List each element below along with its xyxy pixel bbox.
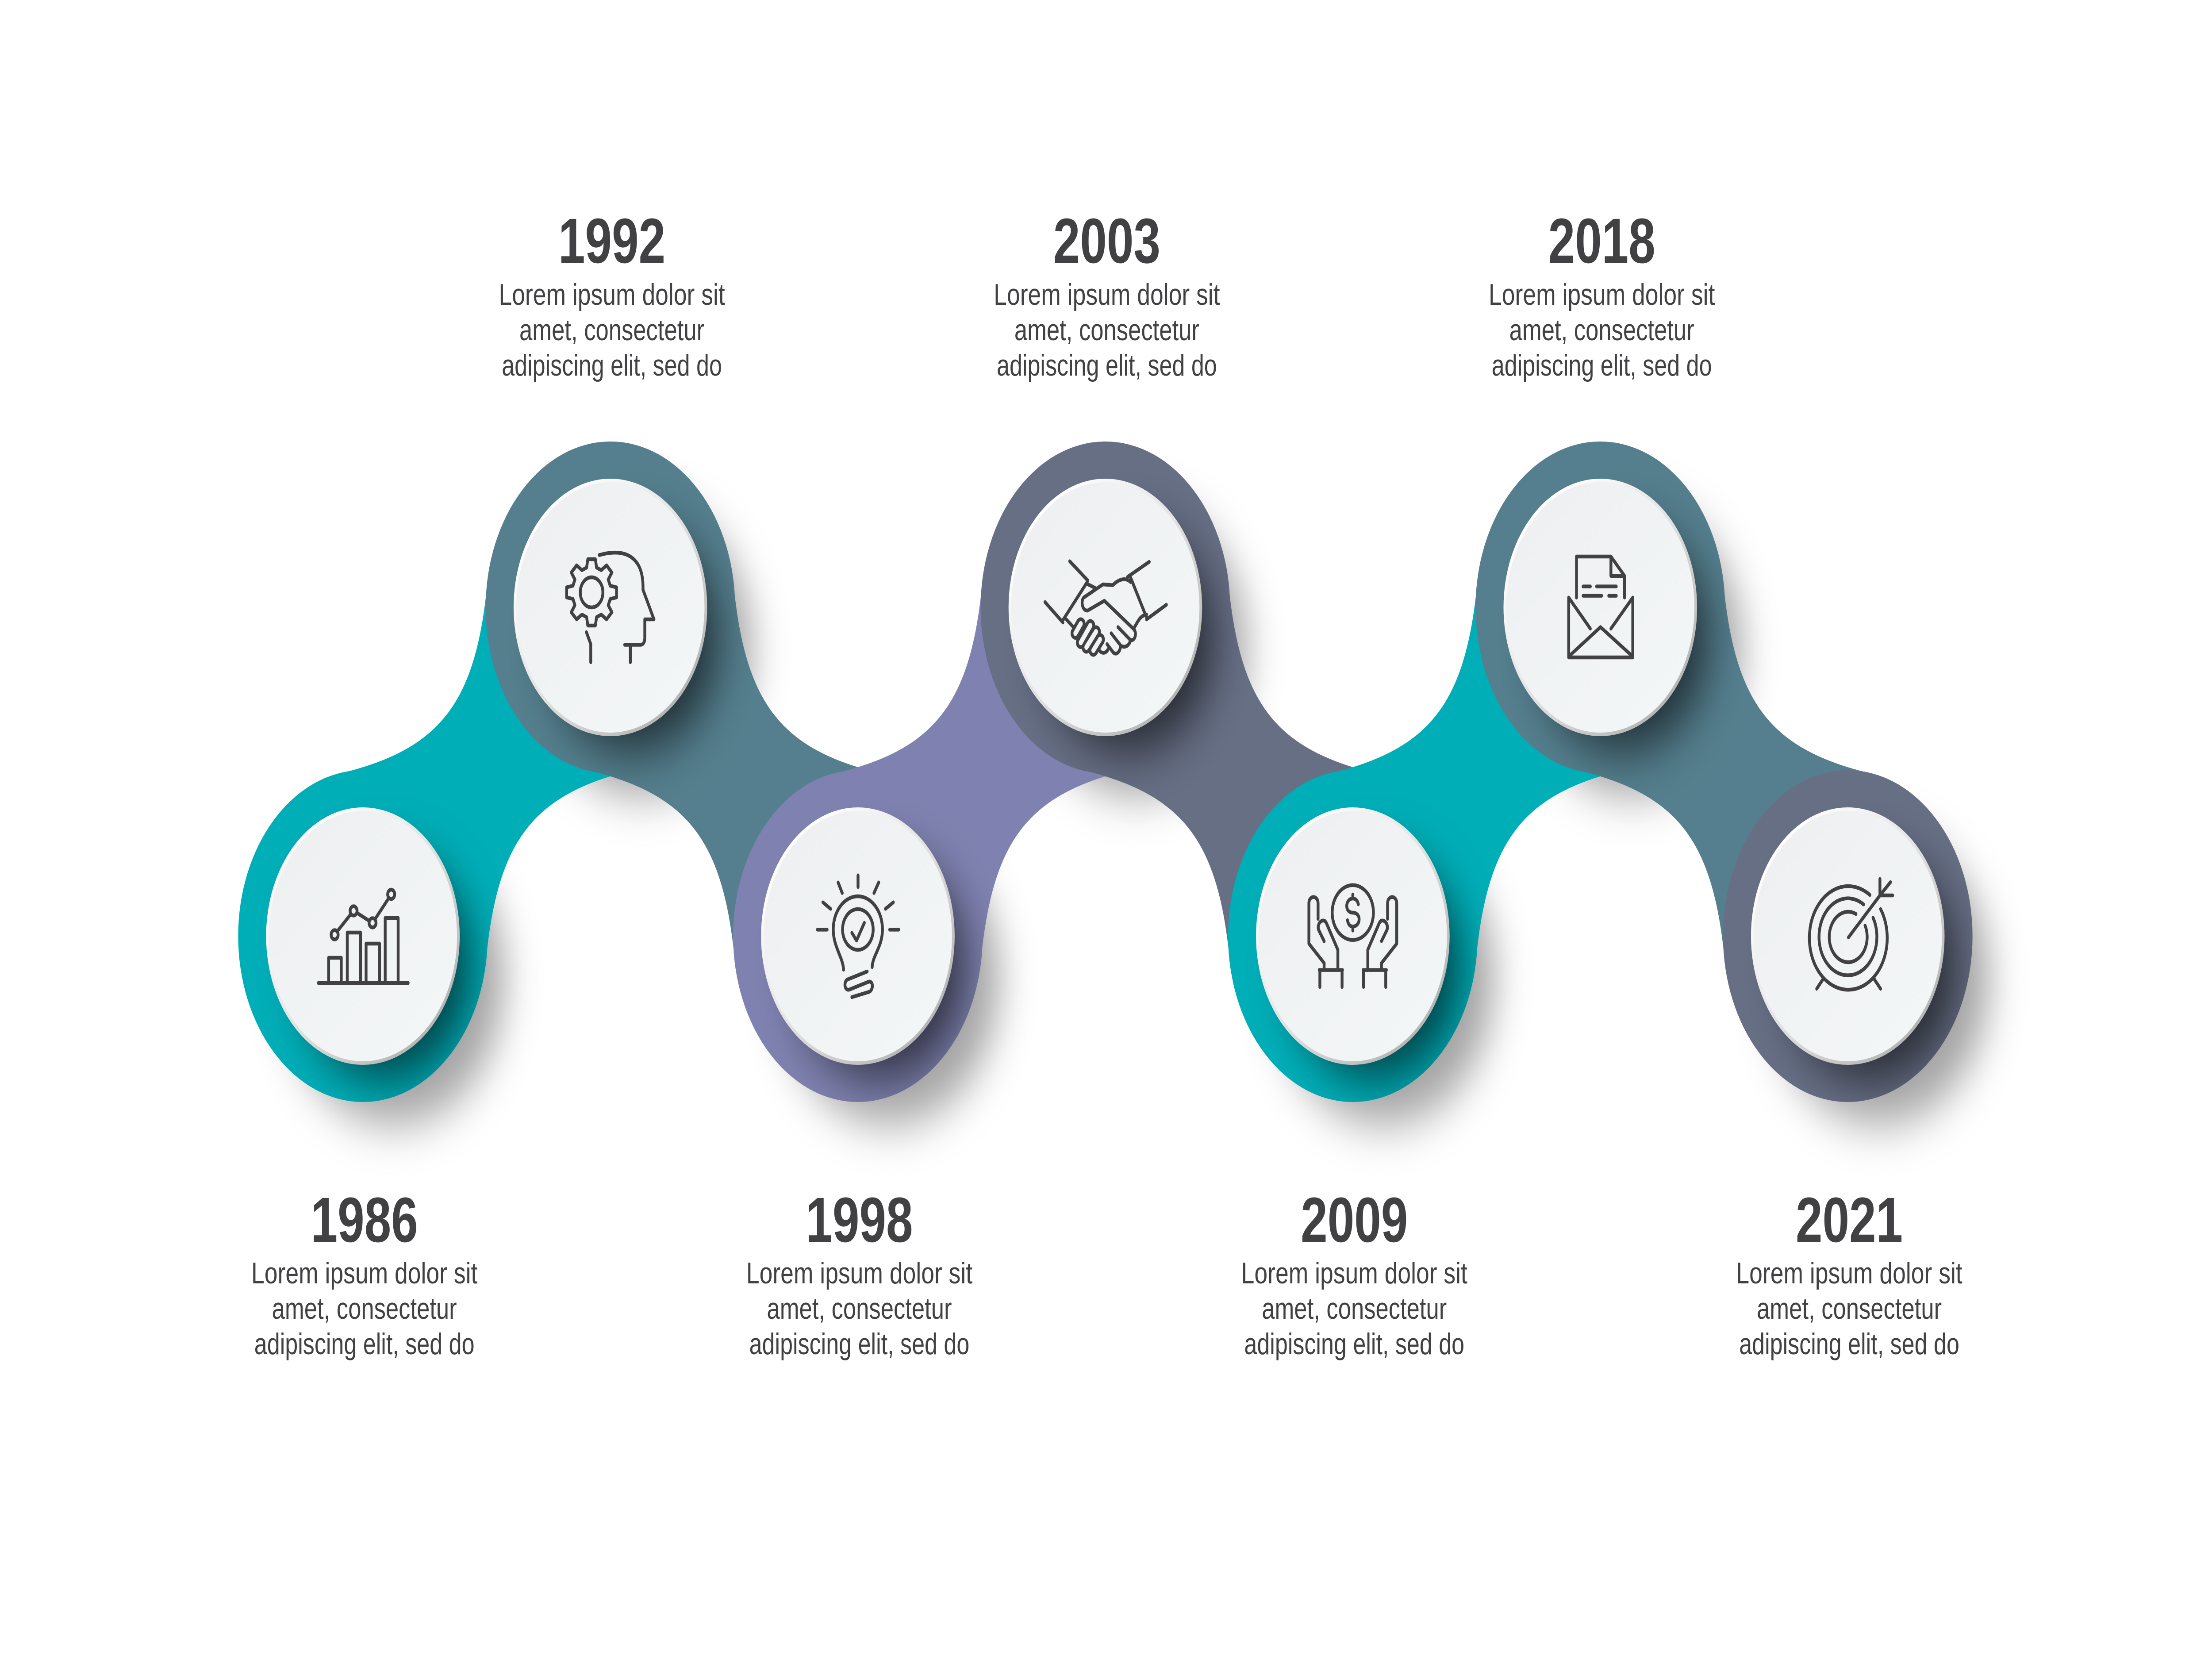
icon: envelope with letter [1569,557,1633,657]
text: 1998: amet, consectetur [767,1292,952,1325]
text: 2003 [994,205,1220,382]
text: 1992: Lorem ipsum dolor sit [499,278,725,311]
node 2021 [1723,770,1973,1102]
disc [1751,807,1944,1065]
text: 2003: amet, consectetur [1014,313,1199,347]
text: 2018: amet, consectetur [1509,313,1694,347]
text: 2021 [1736,1184,1962,1361]
node 2009 [1228,593,1616,1102]
text: 2003: Lorem ipsum dolor sit [994,278,1220,311]
slate ring and connector [981,442,1368,951]
slate ring [1723,770,1973,1102]
text: 1992: amet, consectetur [519,313,704,347]
text: 1998: Lorem ipsum dolor sit [746,1256,972,1290]
text: 2003: adipiscing elit, sed do [997,349,1217,382]
teal ring and connector [1228,593,1616,1102]
disc [761,807,955,1065]
disc [514,479,707,736]
text: 2018 [1489,205,1715,382]
text: 2009: Lorem ipsum dolor sit [1241,1256,1467,1290]
text: 2018: 2018 [1548,205,1655,276]
node 2018 [1475,442,1863,951]
text: 2021: Lorem ipsum dolor sit [1736,1256,1962,1290]
text: 2018: Lorem ipsum dolor sit [1489,278,1715,311]
text: 1998 [746,1184,972,1361]
text: 2021: 2021 [1796,1184,1903,1256]
node 1986 [238,593,626,1102]
text: 1986: Lorem ipsum dolor sit [251,1256,478,1290]
disc [266,807,460,1065]
soft shadows on background [285,503,1989,1124]
text: 1986: adipiscing elit, sed do [254,1327,475,1361]
text: 1992: adipiscing elit, sed do [502,349,722,382]
icon: light bulb with check [818,875,899,997]
node 1992 [486,442,873,951]
icon: bar chart with trend line [319,890,408,983]
text: 2009: 2009 [1301,1184,1408,1256]
node 2003 [981,442,1368,951]
node 1998 [733,593,1121,1102]
text: 2021: amet, consectetur [1757,1292,1942,1325]
icon: head with gear [567,553,654,662]
disc [1503,479,1697,736]
text: 1998: adipiscing elit, sed do [749,1327,969,1361]
slate-teal ring and connector [486,442,873,951]
text: 2021: adipiscing elit, sed do [1739,1327,1959,1361]
icon: hands holding coin [1309,885,1397,987]
text: 2009: amet, consectetur [1262,1292,1447,1325]
text: 1986: 1986 [311,1184,418,1256]
text: 1986 [251,1184,478,1361]
disc [1009,479,1202,736]
text: 2009 [1241,1184,1467,1361]
text: 1986: amet, consectetur [272,1292,457,1325]
text: 1992 [499,205,725,382]
text: 2009: adipiscing elit, sed do [1244,1327,1464,1361]
teal ring and connector [238,593,626,1102]
text: 1992: 1992 [558,205,665,276]
icon: handshake [1045,561,1166,653]
text: 2018: adipiscing elit, sed do [1492,349,1712,382]
text: 2003: 2003 [1053,205,1160,276]
disc [1256,807,1450,1065]
slate-teal ring and connector [1475,442,1863,951]
text: 1998: 1998 [806,1184,913,1256]
icon: target with arrow [1809,879,1893,990]
purple ring and connector [733,593,1121,1102]
